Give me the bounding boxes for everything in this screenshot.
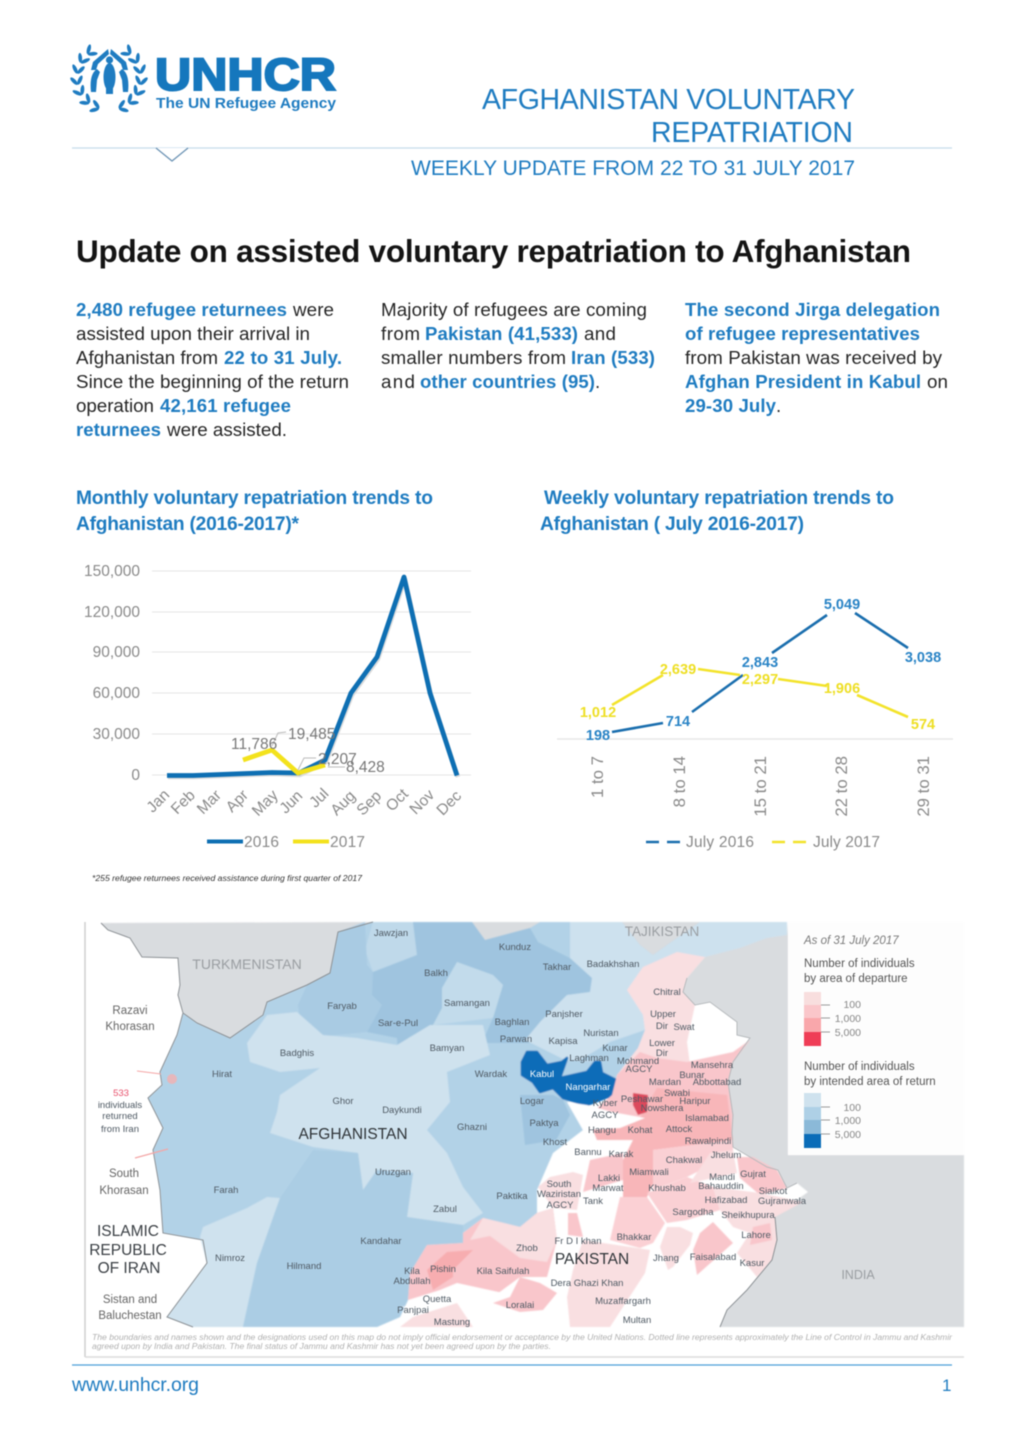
country labels: AFGHANISTAN <box>298 1126 408 1143</box>
text block: left column: were <box>292 299 334 320</box>
title: Update on assisted voluntary repatriation to Afghanistan <box>76 233 911 269</box>
province labels: Karak <box>609 1149 634 1160</box>
heading: monthly chart: Monthly voluntary repatriation trends to <box>76 488 433 509</box>
heading: monthly chart: Afghanistan (2016-2017)* <box>76 514 300 535</box>
Pishin <box>427 1250 473 1290</box>
y axis labels: 90,000 <box>93 644 140 661</box>
month labels: Mar <box>194 787 225 818</box>
category labels <box>588 756 933 817</box>
province labels: Khushab <box>648 1183 686 1194</box>
province labels: Hirat <box>212 1069 232 1080</box>
province labels: Dera Ghazi Khan <box>551 1278 623 1289</box>
month labels: Apr <box>223 787 252 816</box>
y axis labels: 150,000 <box>84 563 140 580</box>
month labels: Jun <box>277 788 306 817</box>
month labels: Nov <box>407 786 438 818</box>
data labels: 8,428 <box>346 759 385 776</box>
legend: area of return <box>804 1061 936 1148</box>
month labels: Jan <box>144 787 173 816</box>
Badakhshan and Panjsher <box>525 922 787 1062</box>
province labels: Ghor <box>332 1096 354 1107</box>
values July 2016: 5,049 <box>824 597 860 613</box>
province labels: Logar <box>520 1096 544 1107</box>
report heading: AFGHANISTAN VOLUNTARY <box>482 84 855 116</box>
province labels: Paktya <box>529 1118 559 1129</box>
province labels: Mastung <box>434 1317 470 1328</box>
province labels: Uruzgan <box>375 1167 411 1178</box>
text block: left column: were assisted. <box>166 419 287 440</box>
series 2016 shadow <box>168 579 458 777</box>
callout: returns from Iran: from Iran <box>101 1124 139 1135</box>
month labels: Dec <box>434 787 465 819</box>
map disclaimer: The boundaries and names shown and the designations used on this map do not imply official endorsement or acceptance by the United Nations. Dotted line represents approximately the Line of Control in Jammu and Kashmir <box>92 1332 953 1342</box>
province labels: Panjsher <box>545 1009 583 1020</box>
province labels: AGCY <box>592 1110 619 1121</box>
legend: area of return: 100 <box>843 1102 861 1114</box>
heading: weekly chart <box>540 488 894 535</box>
province labels: Pishin <box>430 1264 456 1275</box>
text block: right column: of refugee representatives <box>685 323 920 344</box>
country labels <box>89 924 875 1282</box>
Tank <box>568 1213 583 1237</box>
province labels: Lower <box>649 1038 675 1049</box>
text block: left column: 2,480 refugee returnees <box>76 299 287 320</box>
text block: right column: Afghan President in Kabul <box>685 371 921 392</box>
country labels: INDIA <box>841 1268 875 1282</box>
text block: left column: returnees <box>76 419 161 440</box>
text block: middle column: from <box>381 323 420 344</box>
province labels: Balkh <box>424 968 448 979</box>
province labels: Kunar <box>602 1043 628 1054</box>
wordmark: UNHCR <box>155 49 336 100</box>
country labels: PAKISTAN <box>555 1251 629 1268</box>
province labels: Gujrat <box>740 1169 766 1180</box>
callout: returns from Iran: individuals <box>98 1100 142 1111</box>
icon: header chevron <box>156 148 188 161</box>
legend: area of return: 5,000 <box>835 1129 861 1141</box>
province labels: Swat <box>673 1022 695 1033</box>
legend: area of return: 1,000 <box>835 1115 861 1127</box>
heading: weekly chart: Weekly voluntary repatriation trends to <box>544 488 894 509</box>
footer: www.unhcr.org <box>71 1374 199 1396</box>
province labels: Mohmand <box>617 1056 659 1067</box>
Turkmenistan <box>101 922 373 1038</box>
text block: middle column: Pakistan (41,533) <box>425 323 578 344</box>
Samangan <box>433 962 503 1025</box>
text block: left column <box>76 299 349 440</box>
province labels: Gujranwala <box>758 1196 807 1207</box>
text block: middle column <box>381 299 655 392</box>
province labels: Loralai <box>506 1300 534 1311</box>
province labels: Panjpai <box>397 1305 429 1316</box>
text block: middle column: Majority of refugees are coming <box>381 299 647 320</box>
province labels: Kohat <box>628 1125 653 1136</box>
legend: 2017 <box>330 834 365 851</box>
text block: middle column: . <box>595 371 600 392</box>
y axis labels: 120,000 <box>84 604 140 621</box>
tagline: The UN Refugee Agency <box>156 96 336 112</box>
Peshawar <box>633 1093 648 1115</box>
Mansehra, Bunar, Mardan <box>593 1040 750 1140</box>
data labels: 2,207 <box>318 751 357 768</box>
Iran region labels: Baluchestan <box>98 1310 162 1322</box>
province labels: Wardak <box>475 1069 507 1080</box>
country labels: TURKMENISTAN <box>192 956 302 972</box>
Lakki Marwat <box>583 1153 623 1192</box>
month labels <box>144 785 465 820</box>
province labels: Hilmand <box>287 1261 321 1272</box>
Iran region labels: Khorasan <box>99 1185 149 1197</box>
province labels: Bunar <box>679 1070 705 1081</box>
province labels: Kapisa <box>548 1036 578 1047</box>
province labels: South <box>547 1179 571 1190</box>
country labels: REPUBLIC <box>89 1242 167 1259</box>
province labels: Bhakkar <box>617 1232 651 1243</box>
month labels: Sep <box>354 788 385 819</box>
values July 2016: 198 <box>586 728 610 744</box>
province labels: Faryab <box>327 1001 357 1012</box>
province labels: Chitral <box>653 987 681 998</box>
province labels: Khost <box>543 1137 568 1148</box>
y axis labels: 60,000 <box>93 685 140 702</box>
province labels: Ghazni <box>457 1122 487 1133</box>
province labels: Hafizabad <box>705 1195 747 1206</box>
province labels: Laghman <box>569 1053 609 1064</box>
legend panel: As of 31 July 2017 <box>803 935 899 947</box>
y axis labels: 0 <box>131 767 140 784</box>
series 2017 <box>243 750 325 773</box>
province labels: Quetta <box>423 1294 452 1305</box>
text block: middle column: smaller numbers from <box>381 347 566 368</box>
legend: area of return: by intended area of return <box>804 1076 936 1088</box>
province labels: Jhelum <box>711 1150 741 1161</box>
legend: July 2016 <box>686 834 754 851</box>
Mastung <box>400 1303 473 1327</box>
text block: middle column: and <box>381 371 415 392</box>
India and disputed area <box>683 922 964 1327</box>
category labels: 22 to 28 <box>832 756 851 817</box>
province labels: Nuristan <box>583 1028 619 1039</box>
values July 2017 <box>580 662 935 733</box>
legend: July 2017 <box>813 834 880 851</box>
legend panel <box>788 922 964 1155</box>
Bhakkar <box>610 1197 665 1248</box>
text block: right column: The second Jirga delegation <box>685 299 940 320</box>
Balochistan north <box>408 1208 557 1300</box>
province labels: Paktika <box>496 1191 528 1202</box>
text block: right column <box>685 299 948 416</box>
international borders <box>101 922 797 1327</box>
country labels: OF IRAN <box>98 1260 160 1277</box>
values July 2016: 2,843 <box>742 655 778 671</box>
Iran region labels: South <box>109 1168 139 1180</box>
province labels: Upper <box>650 1009 676 1020</box>
province labels: Islamabad <box>685 1113 729 1124</box>
month labels: Feb <box>168 787 199 818</box>
month labels: May <box>249 787 282 820</box>
province labels: Muzaffargarh <box>595 1296 651 1307</box>
values July 2016: 714 <box>666 714 690 730</box>
province labels: AGCY <box>626 1064 653 1075</box>
series 2016 <box>167 577 457 776</box>
province labels: Kunduz <box>499 942 531 953</box>
Kunar and Nuristan <box>580 1030 645 1075</box>
icon: UNHCR emblem <box>69 43 149 116</box>
callout: returns from Iran: 533 <box>113 1088 129 1099</box>
Waziristan <box>538 1172 583 1210</box>
values July 2016: 3,038 <box>905 650 941 666</box>
legend: area of departure <box>804 958 915 1046</box>
province labels: Nangarhar <box>566 1082 610 1093</box>
values July 2017: 574 <box>911 717 935 733</box>
legend: 2016 <box>244 834 279 851</box>
values July 2017: 2,297 <box>742 672 778 688</box>
province labels: Daykundi <box>382 1105 422 1116</box>
text block: right column: on <box>927 371 948 392</box>
province labels: Multan <box>623 1315 651 1326</box>
logo: UNHCR <box>69 43 336 116</box>
text block: left column: 42,161 refugee <box>160 395 291 416</box>
province labels: Zabul <box>433 1204 457 1215</box>
province labels: Dir <box>656 1021 668 1032</box>
report heading <box>411 84 855 180</box>
Dera Ghazi Khan, Muzaffargarh <box>567 1240 650 1327</box>
legend: area of departure: 100 <box>843 999 861 1011</box>
report heading: REPATRIATION <box>651 117 853 149</box>
footnote: *255 refugee returnees received assistance during first quarter of 2017 <box>92 873 362 883</box>
province labels: Tank <box>583 1196 603 1207</box>
leader lines <box>272 732 345 770</box>
province labels: Sheikhupura <box>721 1210 775 1221</box>
province labels: AGCY <box>547 1200 574 1211</box>
province labels: Sar-e-Pul <box>378 1018 418 1029</box>
callout: returns from Iran: returned <box>102 1111 138 1122</box>
Iran region labels: Khorasan <box>105 1021 155 1033</box>
province labels: Jhang <box>653 1253 679 1264</box>
province labels: Nimroz <box>215 1253 245 1264</box>
white Khyber strip <box>567 1102 645 1130</box>
line chart: weekly trends <box>557 597 953 851</box>
province labels: Samangan <box>444 998 490 1009</box>
map: returns by province <box>85 922 964 1357</box>
category labels: 15 to 21 <box>751 756 770 817</box>
Iran region labels: Razavi <box>112 1005 148 1017</box>
data labels: 11,786 <box>231 736 277 753</box>
Khushab, Sargodha <box>647 1177 720 1223</box>
province labels: Abbottabad <box>693 1077 741 1088</box>
province labels: Takhar <box>543 962 571 973</box>
Hafizabad, Sheikhupura <box>713 1187 803 1277</box>
Quetta gap <box>400 1283 503 1310</box>
Kabul and Nangarhar <box>522 1052 620 1105</box>
text block: left column: operation <box>76 395 154 416</box>
Nimroz <box>167 1197 280 1327</box>
province labels: Attock <box>666 1124 692 1135</box>
month labels: Aug <box>328 788 359 819</box>
province labels: Kabul <box>530 1069 554 1080</box>
province labels: Kasur <box>740 1258 764 1269</box>
values July 2016 <box>586 597 941 744</box>
province labels <box>212 928 807 1328</box>
province labels: Marwat <box>592 1183 624 1194</box>
province labels: Fr D I khan <box>554 1236 602 1247</box>
heading: weekly chart: Afghanistan ( July 2016-2017) <box>540 514 804 535</box>
heading: monthly chart <box>76 488 433 535</box>
data labels <box>231 726 385 776</box>
text block: left column: Afghanistan from <box>76 347 218 368</box>
series July 2017 <box>612 669 908 717</box>
province labels: Mandi <box>709 1172 735 1183</box>
month labels: Oct <box>383 785 412 815</box>
footer: 1 <box>942 1376 951 1395</box>
legend: area of departure: by area of departure <box>804 973 908 985</box>
legend <box>646 834 880 851</box>
province labels: Abdullah <box>394 1276 430 1287</box>
Hilmand and Kandahar <box>243 1150 463 1327</box>
Tajikistan <box>622 922 700 955</box>
line chart: monthly trends <box>84 563 471 851</box>
province labels: Hangu <box>588 1125 616 1136</box>
Iran region labels <box>98 1005 162 1322</box>
text block: middle column: Iran (533) <box>571 347 655 368</box>
Zhob <box>470 1208 557 1262</box>
province labels: Chakwal <box>666 1155 702 1166</box>
Afghanistan base <box>148 922 787 1327</box>
Uzbekistan notch <box>472 922 540 940</box>
category labels: 1 to 7 <box>588 756 607 798</box>
Jhang <box>660 1227 693 1270</box>
Badghis, Ghor, Daykundi, Bamyan <box>247 1012 490 1225</box>
province labels: Kandahar <box>360 1236 402 1247</box>
province labels: Baghlan <box>495 1017 529 1028</box>
Faisalabad <box>693 1222 733 1275</box>
province labels: Mansehra <box>691 1060 734 1071</box>
data labels: 19,485 <box>288 726 335 743</box>
province labels: Sialkot <box>759 1186 788 1197</box>
province labels: Sargodha <box>672 1207 714 1218</box>
y axis labels <box>84 563 140 784</box>
legend <box>207 834 365 851</box>
text block: middle column: and <box>584 323 616 344</box>
province labels: Badghis <box>280 1048 314 1059</box>
province labels: Bahauddin <box>698 1181 744 1192</box>
y axis labels: 30,000 <box>93 726 140 743</box>
province labels: Rawalpindi <box>685 1136 731 1147</box>
legend: area of return: Number of individuals <box>804 1061 915 1073</box>
Gujrat <box>737 1157 787 1195</box>
map disclaimer <box>92 1332 953 1351</box>
province labels: Peshawar <box>621 1094 663 1105</box>
Balkh, Sar-e-Pul, Kunduz, Baghlan <box>367 922 592 1053</box>
Jhelum <box>690 1150 737 1183</box>
province labels: Farah <box>214 1185 238 1196</box>
province labels: Bannu <box>574 1147 602 1158</box>
text block: left column: Since the beginning of the return <box>76 371 349 392</box>
province labels: Haripur <box>679 1096 711 1107</box>
Lahore <box>750 1223 772 1245</box>
text block: right column: 29-30 July <box>685 395 777 416</box>
category labels: 8 to 14 <box>670 756 689 807</box>
province labels: Kila Saifulah <box>477 1266 529 1277</box>
province labels: Mardan <box>649 1077 681 1088</box>
values July 2017: 2,639 <box>660 662 696 678</box>
province labels: Kyber <box>593 1098 617 1109</box>
Takhar <box>535 922 570 958</box>
province labels: Faisalabad <box>690 1252 736 1263</box>
province labels: Bamyan <box>430 1043 464 1054</box>
province labels: Waziristan <box>537 1189 581 1200</box>
province labels: Zhob <box>516 1243 538 1254</box>
values July 2017: 1,906 <box>824 681 860 697</box>
Jawzjan <box>365 922 417 972</box>
map disclaimer: agreed upon by India and Pakistan. The final status of Jammu and Kashmir has not yet been agreed upon by the parties. <box>92 1341 551 1351</box>
legend: area of departure: 5,000 <box>835 1027 861 1039</box>
text block: right column: from Pakistan was received by <box>685 347 943 368</box>
legend: area of departure: Number of individuals <box>804 958 915 970</box>
footer <box>71 1365 952 1396</box>
Swabi, Haripur, Attock, Mianwali <box>593 1088 733 1197</box>
province labels: Lakki <box>598 1173 620 1184</box>
province labels: Kila <box>404 1266 421 1277</box>
text block: right column: . <box>776 395 781 416</box>
text block: middle column: other countries (95) <box>420 371 595 392</box>
province labels: Lahore <box>741 1230 771 1241</box>
Rawalpindi, Chakwal <box>653 1140 733 1190</box>
Chitral, Dir <box>617 952 705 1088</box>
text block: left column: 22 to 31 July. <box>224 347 342 368</box>
province labels: Jawzjan <box>374 928 408 939</box>
Iran region labels: Sistan and <box>103 1294 157 1306</box>
Logar and Paktya <box>520 1095 570 1145</box>
month labels: Jul <box>306 785 332 811</box>
text block: left column: assisted upon their arrival in <box>76 323 310 344</box>
province labels: Parwan <box>500 1034 532 1045</box>
values July 2017: 1,012 <box>580 705 616 721</box>
category labels: 29 to 31 <box>914 756 933 817</box>
province labels: Badakhshan <box>587 959 639 970</box>
Loralai <box>493 1277 557 1312</box>
country labels: ISLAMIC <box>97 1223 159 1240</box>
province labels: Swabi <box>664 1088 690 1099</box>
callout: returns from Iran <box>98 1071 177 1158</box>
report heading: WEEKLY UPDATE FROM 22 TO 31 JULY 2017 <box>411 157 855 180</box>
country labels: TAJIKISTAN <box>625 924 699 939</box>
map land shapes <box>101 922 964 1327</box>
Faryab <box>298 922 382 1036</box>
province labels: Nowshera <box>641 1103 684 1114</box>
series July 2016 <box>612 613 908 732</box>
province labels: Miamwali <box>629 1167 669 1178</box>
province labels: Dir <box>656 1048 668 1059</box>
legend: area of departure: 1,000 <box>835 1013 861 1025</box>
